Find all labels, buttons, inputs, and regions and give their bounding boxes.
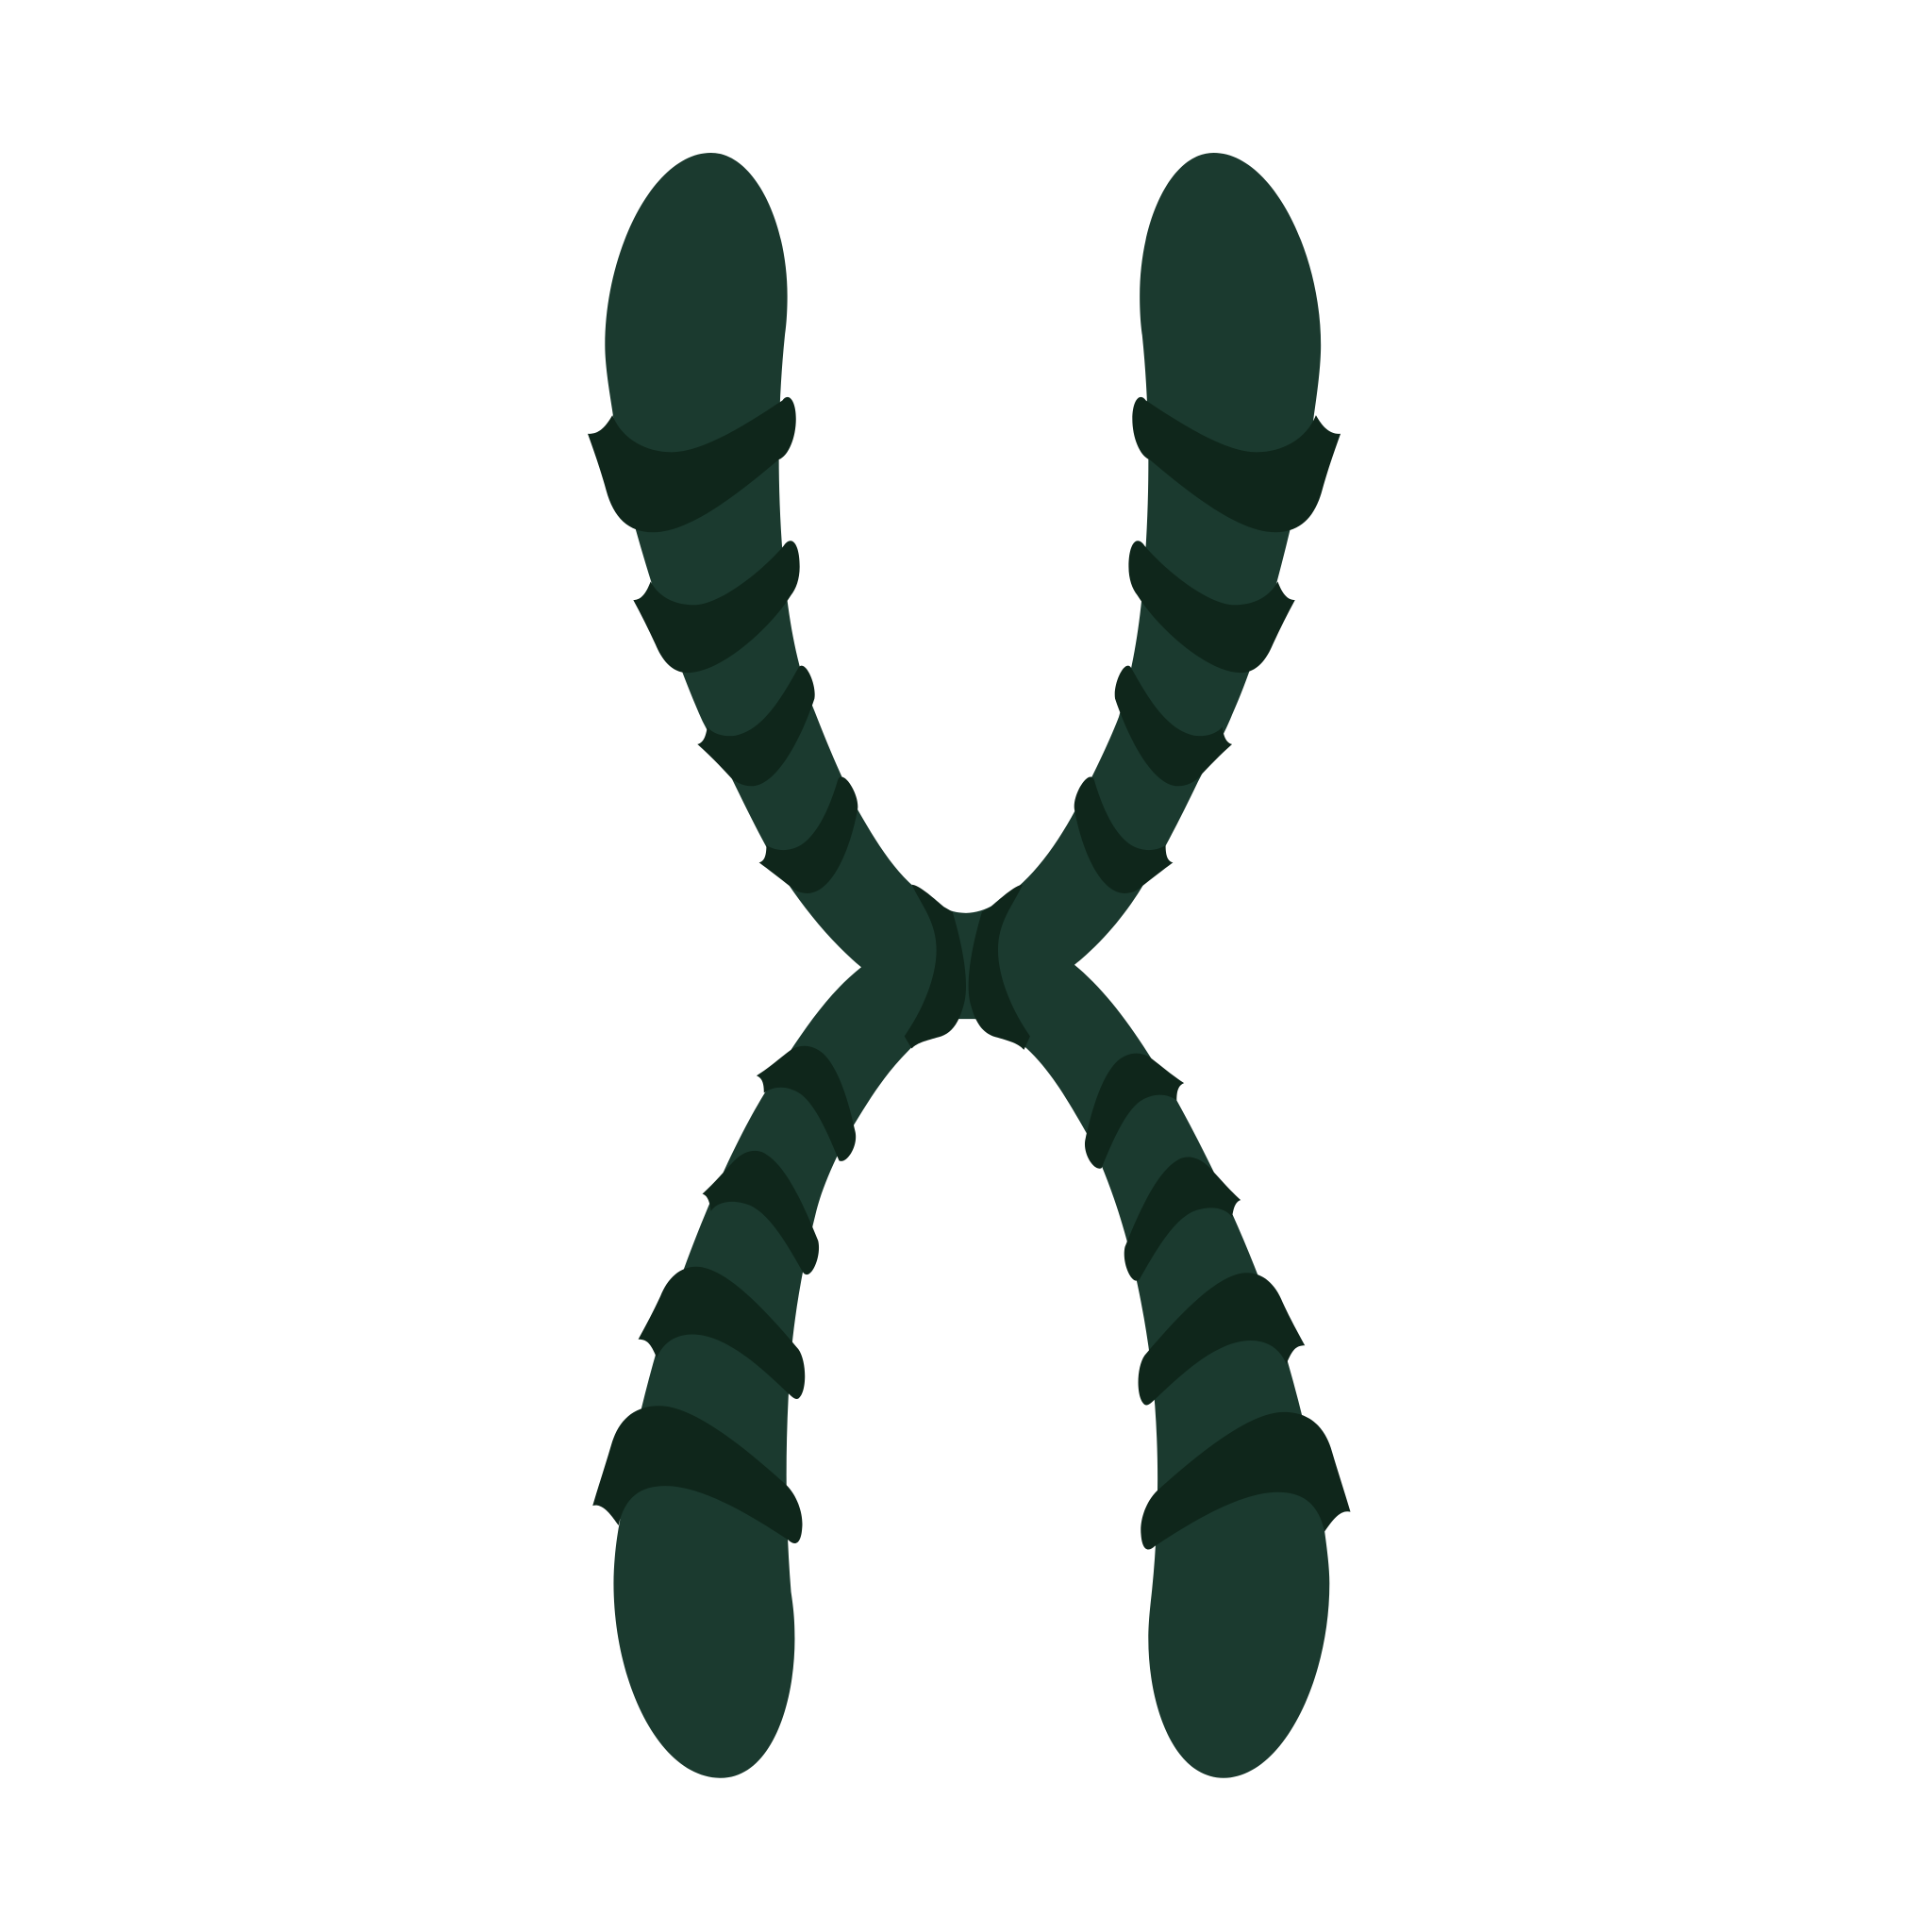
band 4 xyxy=(759,776,858,893)
band 3 xyxy=(1115,666,1232,786)
bands: lower right arm xyxy=(1085,1054,1351,1550)
band 1 xyxy=(1141,1412,1351,1550)
chromosome body xyxy=(605,153,1329,1778)
band 1 xyxy=(588,397,796,532)
band 3 xyxy=(697,666,815,786)
band 2 xyxy=(1128,541,1295,673)
band 2 xyxy=(633,541,800,673)
band 4 xyxy=(1074,776,1173,893)
centromere band left xyxy=(905,885,966,1049)
band 3 xyxy=(1124,1157,1241,1281)
band 2 xyxy=(639,1267,805,1399)
band 1 xyxy=(592,1406,802,1543)
band 1 xyxy=(1132,397,1341,532)
band 4 xyxy=(757,1046,856,1161)
centromere band right xyxy=(969,885,1030,1050)
band 4 xyxy=(1085,1054,1184,1169)
bands: lower left arm xyxy=(592,1046,856,1543)
band 2 xyxy=(1139,1273,1305,1405)
bands: upper left arm xyxy=(588,397,858,893)
bands: upper right arm xyxy=(1074,397,1341,893)
band 3 xyxy=(702,1151,819,1274)
